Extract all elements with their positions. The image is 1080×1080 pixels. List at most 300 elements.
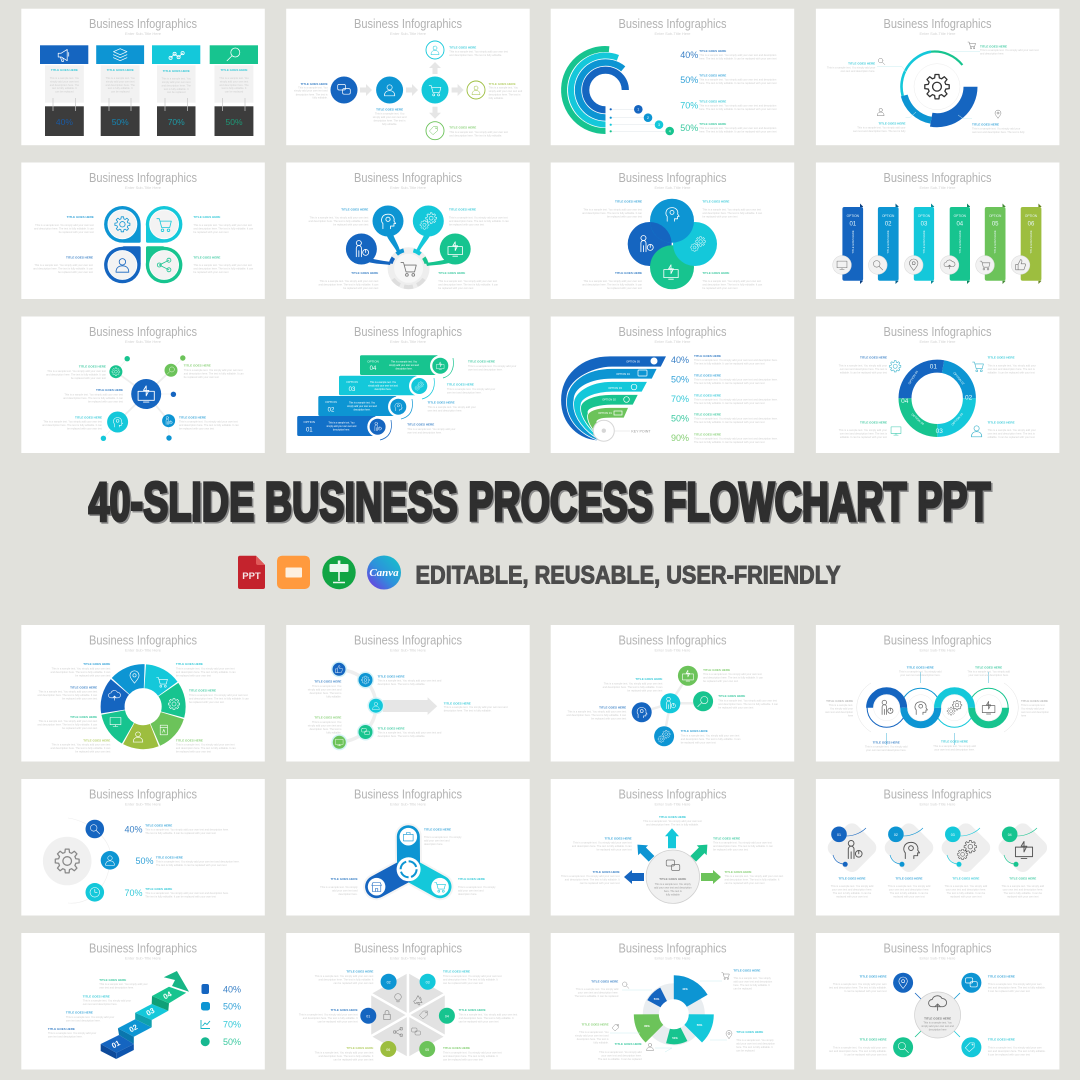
text blocks: TITLE GOES HERE	[591, 979, 618, 983]
card text: can be replaced	[225, 90, 244, 94]
text blocks	[829, 974, 1046, 1056]
ring labels: 01	[930, 364, 937, 370]
percent values: 70%	[168, 117, 185, 127]
bar labels: OPTION	[882, 214, 895, 218]
bar text: simply add your own text and	[389, 364, 420, 367]
bands	[561, 356, 667, 441]
text blocks: be replaced with your own text	[449, 222, 484, 226]
text blocks: This is a sample text. You simply add	[831, 884, 874, 888]
text blocks: here. The text is fully editable. It	[733, 983, 770, 987]
text blocks: This is a sample text. You simply add your	[83, 998, 131, 1002]
text blocks: This is a sample text. You simply add your own text	[583, 208, 642, 212]
ring labels: 03	[936, 428, 943, 435]
connectors	[915, 993, 960, 1037]
text blocks: The text is fully editable. It can be	[833, 891, 872, 895]
slide 22: hexagon of triangles: Enter Sub-Title Here	[390, 956, 426, 960]
text blocks: This is a sample text. You simply add your	[99, 982, 148, 986]
stat icons and values: 70%	[223, 1019, 241, 1029]
text blocks: This is a sample text. You simply add your own text	[702, 208, 761, 212]
percent list: TITLE GOES HERE	[699, 99, 726, 103]
card text: simply add your own text	[106, 79, 135, 83]
text blocks: This is a sample text. You simply add your own text	[176, 666, 235, 670]
bar text	[304, 360, 420, 434]
pinwheel circles	[628, 199, 717, 289]
text blocks: own text and description here.	[83, 1002, 118, 1006]
text blocks: editable. It can be replaced with your text	[840, 370, 887, 374]
card text: This is a sample text. You	[105, 76, 135, 80]
bar labels: 03	[921, 222, 928, 228]
stat icons and values: 40%	[223, 984, 241, 994]
text blocks: fully editable.	[312, 96, 328, 100]
text blocks: TITLE GOES HERE	[449, 126, 476, 130]
centre disc: TITLE GOES HERE	[924, 1016, 951, 1020]
percent list: 50%	[680, 75, 698, 85]
text blocks: description here. The text is	[310, 727, 342, 731]
text blocks: TITLE GOES HERE	[988, 356, 1015, 360]
percent list: TITLE GOES HERE	[694, 432, 721, 436]
text blocks: TITLE GOES HERE	[96, 388, 123, 392]
percent list: This is a sample text. You simply add your own text and description here.	[694, 397, 778, 401]
percent list	[671, 354, 778, 444]
text blocks: This is a sample text. You simply add your own text	[583, 279, 642, 283]
percent rows: TITLE GOES HERE	[145, 824, 172, 828]
grey arrows	[360, 62, 464, 119]
text blocks: can be replaced with your own text	[443, 981, 483, 985]
slide 11: nested wing bands with key point: Business Infographics	[618, 325, 726, 339]
text blocks	[839, 356, 1036, 439]
percent list: TITLE GOES HERE	[694, 393, 721, 397]
percent values: 50%	[112, 117, 129, 127]
number badges: 06	[386, 1048, 390, 1052]
text blocks	[308, 674, 508, 738]
text blocks: This is a sample text. You simply add your own text	[724, 874, 783, 878]
text blocks: and description here. The text is fully editable. It can	[37, 722, 98, 726]
text blocks: add your own text and description	[736, 1042, 776, 1046]
text blocks: This is a sample text. You simply add your own text	[299, 1012, 358, 1016]
text blocks: own text and description here. The text is fully	[853, 129, 906, 133]
slice values: 51%	[654, 997, 660, 1001]
text blocks: and description here. The text is fully editable. It	[443, 1054, 498, 1058]
text blocks: own text and description here.	[428, 408, 462, 412]
text blocks	[320, 828, 496, 896]
header icons	[58, 48, 240, 61]
ring labels: OPTION 04	[911, 413, 925, 426]
text blocks: be replaced with your own text	[189, 700, 224, 704]
bar text: simply add your own text and	[347, 405, 378, 408]
text blocks: TITLE GOES HERE	[988, 1038, 1015, 1042]
slide 10: stepped option bars: Enter Sub-Title Here	[390, 340, 426, 344]
text blocks: and description here. The text is fully editable. It can	[51, 670, 111, 674]
text blocks: and description here. The text is fully editable. It	[319, 1054, 374, 1058]
text blocks: description here.	[424, 842, 443, 846]
slide 22: hexagon of triangles: Business Infographics	[354, 941, 462, 955]
text blocks: This is a sample text. You simply add your	[839, 364, 887, 368]
text blocks: This is a sample text. You simply add your own text	[315, 1050, 374, 1054]
text blocks: be replaced with your own text	[597, 848, 632, 852]
text blocks: TITLE GOES HERE	[66, 255, 93, 259]
text blocks: own text and description	[825, 710, 854, 714]
text blocks: TITLE GOES HERE	[179, 415, 206, 419]
text blocks: This is a sample text. You simply add your own text	[43, 420, 102, 424]
nodes	[893, 973, 981, 1057]
slide 1: four hanging cards: Business Infographics	[89, 17, 197, 31]
text blocks: This is a sample text. You simply add	[865, 744, 908, 748]
slide 12: option donut: Enter Sub-Title Here	[920, 340, 956, 344]
percent rows: 40%	[124, 824, 143, 834]
percent rows: TITLE GOES HERE	[145, 887, 172, 891]
text blocks: your own text and description here.	[968, 673, 1009, 677]
connectors	[103, 358, 183, 438]
slide 23: exploded donut chart: Enter Sub-Title Here	[654, 956, 691, 960]
bar labels: TITLE GOES HERE	[1029, 230, 1033, 254]
centre disc: This is a sample text. You	[923, 1022, 952, 1024]
stair numbers: 03	[145, 1006, 156, 1018]
text blocks: own text and description here. The text is	[988, 432, 1036, 436]
slide 8: six option bars: Business Infographics	[884, 171, 992, 185]
text blocks: and description here. The text is fully editable. It can	[319, 282, 379, 286]
percent list: This is a sample text. You simply add your own text and description here.	[694, 417, 778, 421]
text blocks: be replaced with your own text	[702, 214, 738, 218]
text blocks: This is a sample text. You simply add your own text	[438, 279, 497, 283]
text blocks: TITLE GOES HERE	[314, 680, 341, 684]
text blocks: be replaced with your own text	[681, 740, 716, 744]
text blocks: TITLE GOES HERE	[378, 726, 405, 730]
text blocks: own text and description here. The text is	[840, 367, 888, 371]
ring	[877, 52, 980, 120]
slide 14: arc of nodes with big arrow: Enter Sub-Title Here	[390, 648, 426, 652]
icon: Keynote	[322, 556, 356, 589]
text blocks: This is a sample text. You simply add	[945, 884, 988, 888]
text blocks: TITLE GOES HERE	[838, 877, 866, 881]
number badges: 02	[387, 980, 391, 984]
text blocks: TITLE GOES HERE	[189, 689, 216, 693]
card text: text is fully editable. It	[222, 86, 247, 90]
card text: This is a sample text. You	[219, 76, 249, 80]
text blocks: replaced with your own text	[836, 894, 868, 898]
slice values: 80%	[644, 1024, 650, 1028]
text blocks: TITLE GOES HERE	[443, 1046, 470, 1050]
text blocks	[33, 215, 254, 274]
percent rows: TITLE GOES HERE	[156, 855, 183, 859]
arms	[377, 837, 440, 887]
text blocks: This is a sample text. You simply add your own text and	[378, 678, 442, 682]
slide 9: hub and satellites	[21, 316, 265, 453]
bar labels: TITLE GOES HERE	[886, 230, 890, 254]
outline circles	[426, 41, 485, 140]
stair numbers: 01	[110, 1038, 122, 1050]
text blocks: TITLE GOES HERE	[438, 271, 465, 275]
stair numbers	[110, 989, 174, 1050]
text blocks: simply add your own text and	[294, 89, 328, 93]
percent list: The text is fully editable. It can be replaced with your own text	[694, 381, 765, 385]
connectors	[642, 676, 703, 736]
text blocks: This is a sample text. You simply add your own text	[176, 742, 235, 746]
text blocks: This is a sample text. You simply	[424, 835, 462, 839]
ring labels: 02	[965, 394, 973, 402]
text blocks: and description here. The text is fully editable. It can	[51, 746, 111, 750]
text blocks: own text and description here.	[841, 69, 875, 73]
text blocks: own text and description here.	[407, 430, 442, 434]
band labels: OPTION 05	[626, 360, 640, 364]
text blocks: and description here. The text is fully editable. It	[724, 878, 780, 882]
text blocks: your own text and description here.	[934, 748, 975, 752]
slide 15: branching circles network	[551, 625, 794, 762]
text blocks: and description here. The text is fully editable. It can	[193, 226, 254, 230]
text blocks: This is a sample text. You simply add your	[447, 387, 495, 391]
slice values: 41%	[682, 987, 688, 991]
text blocks: can be replaced with your own text	[333, 981, 374, 985]
ring labels: OPTION 02	[952, 371, 966, 386]
text blocks: TITLE GOES HERE	[443, 970, 470, 974]
bar text: 02	[328, 408, 335, 414]
percent list: 70%	[680, 100, 698, 110]
text blocks: TITLE GOES HERE	[75, 415, 102, 419]
text blocks: This is a sample text. You simply add your	[988, 364, 1036, 368]
text blocks: fully editable.	[489, 96, 504, 100]
text blocks: TITLE GOES HERE	[459, 1008, 486, 1012]
text blocks: This is a sample text. You simply add your	[839, 428, 887, 432]
percent list: This is a sample text. You simply add your own text and description	[699, 126, 777, 130]
text blocks: This is a sample text. You simply add your own text	[449, 50, 508, 54]
text blocks: description here. The text is	[489, 92, 521, 96]
text blocks: This is a sample text. You simply add your	[428, 405, 476, 409]
number badges	[360, 974, 455, 1057]
text blocks: TITLE GOES HERE	[718, 694, 745, 698]
text blocks: This is a sample text. You simply add your own text	[443, 1050, 502, 1054]
arcs	[564, 49, 625, 131]
text blocks: TITLE GOES HERE	[83, 994, 110, 998]
text blocks: The text is fully editable. It can be	[947, 891, 986, 895]
text blocks: The text is fully editable. It can be	[890, 891, 929, 895]
percent list: This is a sample text. You simply add your own text and description	[699, 103, 777, 107]
text blocks: TITLE GOES HERE	[193, 215, 220, 219]
slide 23: exploded donut chart: Business Infographics	[618, 941, 726, 955]
bar text: This is a sample text. You	[349, 402, 376, 404]
text blocks: This is a sample text. You simply add your own	[988, 982, 1042, 986]
text blocks: This is a sample text. You simply add your	[48, 1031, 96, 1035]
slide 6: balloons from a hub	[286, 162, 530, 299]
text blocks: TITLE GOES HERE	[99, 978, 126, 982]
text blocks: can be replaced	[736, 1048, 755, 1052]
percent rows: This is a sample text. You simply add your own text and description here.	[145, 828, 229, 832]
text blocks: This is a sample text. You simply add your own text	[39, 690, 97, 694]
text blocks	[48, 978, 148, 1038]
text blocks: This is a sample text.	[1021, 703, 1046, 707]
text blocks: TITLE GOES HERE	[941, 740, 968, 744]
centre disc: description here	[929, 1028, 947, 1032]
text blocks: It can be replaced with your own text	[844, 989, 887, 993]
card text: This is a sample text. You	[50, 76, 80, 80]
text blocks: your own text and description here.	[1003, 888, 1043, 892]
hub	[388, 247, 430, 289]
band labels: OPTION 02	[602, 398, 616, 402]
icon: Canva	[367, 556, 401, 590]
text blocks: This is a sample text. You simply	[736, 1038, 774, 1042]
text blocks: be replaced with your own text	[59, 230, 94, 234]
stair numbers: 04	[162, 989, 174, 1001]
text blocks: fully editable.	[593, 1040, 609, 1044]
text blocks: TITLE GOES HERE	[605, 836, 632, 840]
text blocks: description here.	[338, 892, 358, 896]
triangles	[370, 972, 446, 1058]
centre disc: fully editable	[666, 894, 680, 896]
text blocks: text and description here. The text is fully editable.	[988, 986, 1046, 990]
card text: simply add your own text	[220, 79, 249, 83]
bar labels: OPTION	[1025, 214, 1038, 218]
text blocks: and description here. The text is fully editable. It can	[176, 670, 236, 674]
card text: text is fully editable. It	[108, 86, 133, 90]
text blocks: your own text and description here.	[946, 888, 986, 892]
number badges: 02	[894, 833, 898, 837]
text blocks: This is a sample text.	[829, 703, 853, 707]
dark percent boxes	[45, 106, 253, 136]
text blocks: can be replaced with your own text	[318, 1020, 358, 1024]
text blocks: be replaced with your own text	[71, 376, 106, 380]
bar labels: OPTION	[954, 214, 967, 218]
centre disc	[915, 992, 961, 1038]
text blocks: This is a sample text. You simply add your own text	[184, 368, 243, 372]
icon: Canva: Canva	[369, 567, 399, 579]
card text: and description here. The	[162, 83, 191, 87]
text blocks: TITLE GOES HERE	[449, 208, 476, 212]
bars	[297, 355, 438, 436]
text blocks: TITLE GOES HERE	[378, 674, 405, 678]
text blocks: TITLE GOES HERE	[593, 870, 620, 874]
text blocks: This is a sample text. You simply add	[967, 670, 1010, 674]
balloons and tapered tails	[346, 206, 471, 266]
percent rows: The text is fully editable. It can be replaced with your own text	[145, 831, 216, 835]
text blocks: be replaced with your own text	[718, 706, 754, 710]
text blocks: be replaced with your own text	[75, 750, 111, 754]
slide 24: cloud hub with four nodes: Business Infographics	[884, 941, 992, 955]
text blocks: TITLE GOES HERE	[988, 974, 1015, 978]
text blocks: This is a sample text. You	[312, 720, 342, 724]
text blocks: can be replaced	[733, 986, 752, 990]
bar labels: TITLE GOES HERE	[993, 230, 997, 254]
stairs	[101, 971, 189, 1059]
text blocks: and description here. The text is fully editable. It can	[309, 219, 369, 223]
text blocks: and description here. The text is fully editable. It can	[37, 693, 98, 697]
text blocks: here. The text is fully editable. It	[736, 1045, 773, 1049]
text blocks: TITLE GOES HERE	[724, 870, 752, 874]
text blocks: TITLE GOES HERE	[331, 1008, 358, 1012]
text blocks: TITLE GOES HERE	[988, 420, 1015, 424]
text blocks: can be replaced with your own text	[580, 881, 620, 885]
text blocks: can be replaced with your own text	[443, 1058, 483, 1062]
nodes	[331, 661, 384, 750]
triangle icons	[384, 994, 428, 1037]
key point: KEY POINT	[631, 430, 651, 434]
text blocks: TITLE GOES HERE	[615, 200, 642, 204]
bar text: description here.	[375, 388, 392, 391]
text blocks: be replaced with your own text	[343, 286, 379, 290]
text blocks: TITLE GOES HERE	[702, 200, 729, 204]
icon discs	[833, 256, 1030, 274]
text blocks: be replaced with your own text	[438, 286, 474, 290]
slide 9: hub and satellites: Business Infographics	[89, 325, 197, 339]
gear disc	[43, 837, 92, 885]
slide 2: horizontal flow with branches	[286, 9, 530, 145]
slide 7: overlapping circles: Enter Sub-Title Here	[654, 186, 691, 190]
slide 17: gear with percent rows: Business Infographics	[89, 787, 197, 801]
numbered leader lines: 1	[637, 108, 639, 112]
icon discs	[86, 820, 119, 902]
card text: TITLE GOES HERE	[51, 68, 78, 72]
text blocks: fully editable.	[382, 122, 397, 126]
bar labels: TITLE GOES HERE	[851, 230, 855, 254]
stat icons and values: 50%	[223, 1002, 241, 1012]
text blocks: This is a sample text. You simply add your	[857, 126, 906, 130]
text blocks	[561, 815, 783, 885]
text blocks: This is a sample text. You simply add your own text	[568, 710, 626, 714]
slide 13: seven-segment cycle: Business Infographics	[89, 633, 197, 647]
percent list: TITLE GOES HERE	[699, 122, 726, 126]
percent list	[680, 49, 777, 134]
text blocks: TITLE GOES HERE	[826, 699, 853, 703]
slide 2: horizontal flow with branches: Business Infographics	[354, 17, 462, 31]
band labels: OPTION 04	[616, 372, 630, 376]
text blocks: and description here. The text is fully editable. It	[303, 1016, 358, 1020]
step discs	[367, 355, 453, 440]
text blocks: TITLE GOES HERE	[736, 1030, 763, 1034]
number badges: 03	[951, 833, 955, 837]
percent rows: This is a sample text. You simply add your own text and description here.	[145, 891, 229, 895]
percent list: here. The text is fully editable. It can be replaced with your own text	[699, 130, 777, 134]
process circles	[330, 76, 448, 104]
thin curves	[833, 828, 1037, 864]
text blocks: replaced with your own text	[1007, 894, 1039, 898]
percent list: 50%	[680, 123, 698, 133]
text blocks: description here. The text is	[310, 691, 342, 695]
card text: and description here. The	[106, 83, 135, 87]
percent values: 40%	[56, 117, 73, 127]
text blocks: be replaced with your own text	[703, 679, 738, 683]
number badges: 01	[366, 1014, 370, 1018]
text blocks: be replaced with your own text	[193, 230, 229, 234]
text blocks: be replaced with your own text	[607, 286, 642, 290]
text blocks	[574, 968, 776, 1061]
slide 15: branching circles network: Enter Sub-Title Here	[654, 648, 691, 652]
text blocks: This is a sample text. You simply add	[599, 1050, 642, 1054]
text blocks: own text and description here.	[447, 390, 482, 394]
numbered leader lines: 2	[647, 116, 649, 120]
slide 12: option donut	[816, 316, 1059, 453]
text blocks: TITLE GOES HERE	[615, 271, 642, 275]
percent list: TITLE GOES HERE	[699, 49, 726, 53]
text blocks: and description here. The text is fully editable. It can	[582, 282, 643, 286]
text blocks: TITLE GOES HERE	[895, 877, 923, 881]
text blocks: editable. It can be replaced with your text	[840, 435, 887, 439]
text blocks: TITLE GOES HERE	[599, 705, 626, 709]
text blocks	[42, 364, 244, 430]
icon: PowerPoint file: PPT	[242, 571, 261, 582]
card text: simply add your own text	[162, 80, 191, 84]
text blocks: This is a sample text. You simply add your own text	[193, 263, 252, 267]
text blocks: TITLE GOES HERE	[848, 61, 875, 65]
text blocks: description here. The text is fully editable.	[378, 734, 426, 738]
text blocks: own text and description	[1021, 710, 1050, 714]
card text: TITLE GOES HERE	[163, 69, 190, 73]
card text: TITLE GOES HERE	[107, 68, 134, 72]
icons	[877, 42, 1001, 118]
card text: text is fully editable. It	[164, 87, 189, 91]
slide 21: isometric staircase	[21, 933, 265, 1070]
ring	[905, 366, 969, 430]
text blocks: This is a sample text. You simply add your own	[833, 982, 887, 986]
card text: TITLE GOES HERE	[220, 68, 248, 72]
card text: simply add your own text	[50, 79, 79, 83]
text blocks: This is a sample text. You simply add your own	[988, 1046, 1042, 1050]
